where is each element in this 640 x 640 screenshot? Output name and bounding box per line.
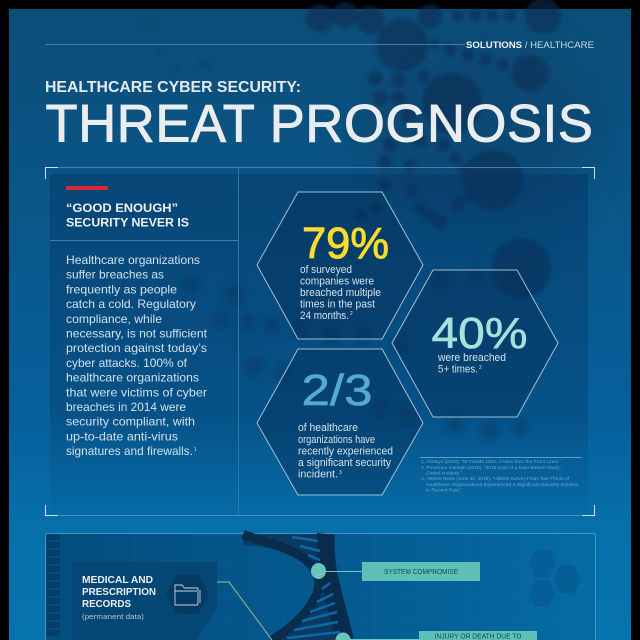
label: injury or death (419, 631, 537, 640)
hexagon stat: 2/3: 2/3 (302, 366, 372, 415)
body text: breaches in 2014 were (66, 401, 186, 414)
callout: medical and prescription records: MEDICAL AND (82, 575, 153, 586)
hexagon stat: 2/3: of healthcare (298, 422, 358, 434)
body text: frequently as people (66, 283, 177, 296)
footnotes (420, 457, 582, 492)
heading divider (50, 240, 238, 241)
section heading: SECURITY NEVER IS (66, 216, 189, 230)
body text (66, 254, 208, 458)
hexagon stat: 79%: breached multiple (300, 287, 381, 299)
body text: compliance, while (66, 313, 162, 326)
hexagon stat: 79%: 79% (302, 219, 389, 268)
hexagon stat: 2/3: a significant security (298, 457, 392, 469)
hexagon stat: 79%: of surveyed (300, 264, 352, 276)
hexagon stat: 79%: companies were (300, 276, 374, 288)
body text: necessary, is not sufficient (66, 328, 208, 340)
hexagon stat: 2/3: recently experienced (298, 446, 393, 458)
connector: system compromise (311, 563, 362, 579)
callout: medical and prescription records (72, 562, 217, 640)
footnotes: 1. FireEye (2015). “M-Trends 2015: A View from the Front Lines.” (421, 459, 561, 464)
body text: security compliant, with (66, 416, 195, 429)
top rule (45, 44, 465, 45)
callout: medical and prescription records: (permanent data) (82, 612, 145, 621)
section heading (66, 201, 189, 230)
hexagon stat: 40%: 2 (479, 365, 482, 371)
body text: suffer breaches as (66, 269, 164, 282)
hexagon stat: 40%: were breached (437, 352, 506, 364)
connector line (217, 582, 272, 640)
hexagon stat: 79% (257, 192, 423, 339)
icon: folder in hexagon (166, 575, 209, 614)
footnotes: Global Analysis.” (426, 470, 462, 476)
footnotes: 3. HIMSS News (June 30, 2015). “HIMSS Survey Finds Two-Thirds of (421, 476, 570, 481)
hexagon stat: 40% (392, 270, 558, 417)
DNA helix (243, 534, 351, 640)
hexagon stat: 40%: 5+ times. (438, 364, 478, 376)
body text: up-to-date anti-virus (66, 430, 178, 443)
label: system compromise: SYSTEM COMPROMISE (384, 569, 458, 576)
hexagon stat: 2/3: 3 (339, 470, 342, 476)
panel: consequences diagram (46, 534, 596, 640)
connector: injury or death (336, 632, 419, 640)
section label: SOLUTIONS / HEALTHCARE (466, 40, 594, 50)
side stripes (46, 534, 60, 636)
body text: protection against today’s (66, 342, 207, 355)
callout: medical and prescription records: PRESCRIPTION (82, 587, 156, 598)
footnotes: 2. Ponemon Institute (2015). “2015 Cost of a Data Breach Study: (421, 465, 561, 470)
body text: cyber attacks. 100% of (66, 357, 188, 370)
hexagon stat: 79%: 24 months. (300, 310, 349, 322)
body text: healthcare organizations (66, 372, 199, 385)
section heading: “GOOD ENOUGH” (66, 201, 178, 215)
body text: Healthcare organizations (66, 254, 200, 267)
main title: THREAT PROGNOSIS (46, 95, 594, 154)
body text: that were victims of cyber (66, 386, 207, 399)
hexagon stat: 79%: 2 (350, 311, 353, 317)
hexagon stat: 40%: 40% (432, 309, 528, 358)
panel: threat overview (45, 167, 595, 516)
title kicker: HEALTHCARE CYBER SECURITY: (45, 79, 301, 96)
decorative hexagons (529, 550, 581, 607)
hexagon stat: 79%: times in the past (300, 298, 375, 310)
red accent bar (66, 186, 108, 190)
callout: medical and prescription records: RECORDS (82, 599, 131, 610)
body text: 1 (194, 447, 197, 453)
hexagon stat: 2/3 (257, 349, 423, 495)
body text: catch a cold. Regulatory (66, 298, 196, 311)
label: system compromise (362, 562, 480, 581)
footnotes: Healthcare Organizations Experienced a Significant Security Incident (426, 482, 579, 487)
blurred DNA background image (146, 0, 600, 440)
hexagon stat: 2/3: organizations have (298, 434, 375, 446)
footnotes: in Recent Past.” (426, 488, 463, 492)
hexagon stat: 2/3: incident. (298, 468, 338, 480)
body text: signatures and firewalls. (66, 445, 193, 458)
